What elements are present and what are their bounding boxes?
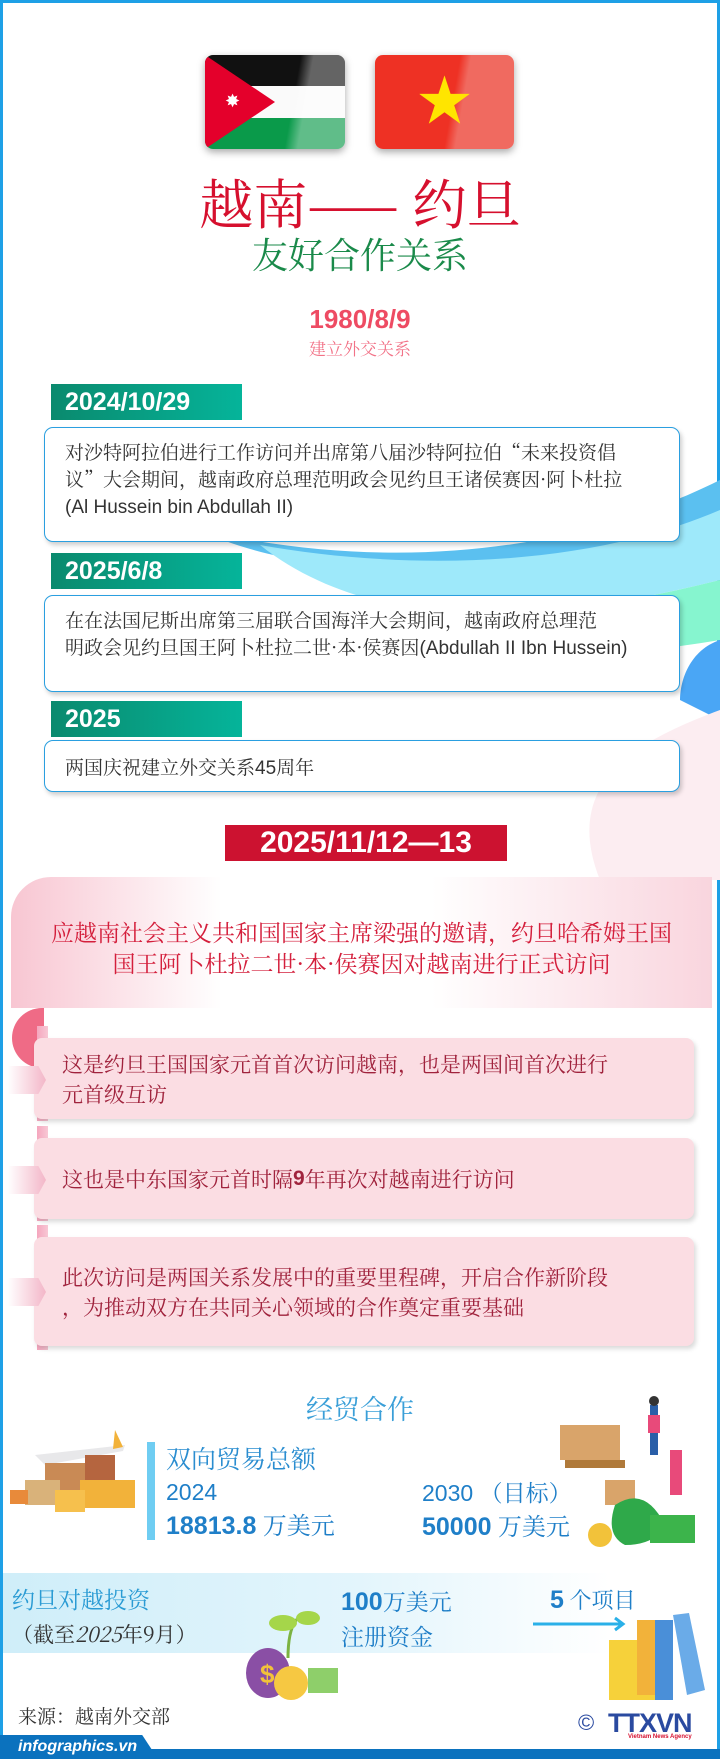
- icon: money bag plant: $: [260, 1659, 275, 1689]
- registered capital: 注册资金: [341, 1619, 433, 1652]
- date 1980: 1980/8/9: [309, 304, 411, 334]
- bullet 3: [12, 1225, 698, 1350]
- logo: TTXVN: ©: [578, 1710, 594, 1735]
- visit date banner: [225, 825, 507, 861]
- tab 2025: 2025: [65, 705, 121, 733]
- tab 2024/10/29: [51, 384, 242, 420]
- invitation panel: 国王阿卜杜拉二世·本·侯赛因对越南进行正式访问: [112, 946, 611, 979]
- footer tab: infographics.vn: [0, 1735, 152, 1754]
- background swirl: [228, 480, 720, 880]
- box 1: [44, 427, 680, 542]
- source: 来源：越南外交部: [18, 1702, 170, 1729]
- bullet 2: 这也是中东国家元首时隔 年再次对越南进行访问: [62, 1164, 515, 1194]
- logo: TTXVN: [578, 1708, 692, 1740]
- arrow: [533, 1616, 626, 1632]
- footer bar: [0, 1749, 720, 1759]
- bullet 2: [12, 1126, 698, 1224]
- icon: cargo plane and trucks: [10, 1430, 135, 1512]
- invitation panel: [11, 877, 712, 1008]
- icon: warehouse workers and money: [560, 1396, 695, 1547]
- invitation panel: 应越南社会主义共和国国家主席梁强的邀请，约旦哈希姆王国: [51, 915, 672, 948]
- investment label: 约旦对越投资: [12, 1582, 150, 1615]
- trade 2024: 18813.8 万美元: [166, 1506, 335, 1541]
- box 1: (Al Hussein bin Abdullah II): [65, 497, 293, 518]
- visit date banner: 2025/11/12—13: [260, 826, 472, 859]
- box 1: 对沙特阿拉伯进行工作访问并出席第八届沙特阿拉伯“未来投资倡: [65, 438, 616, 465]
- projects count: 5 个项目: [550, 1584, 636, 1615]
- investment band: [3, 1573, 717, 1653]
- trade 2030: 50000 万美元: [422, 1507, 570, 1542]
- investment label: （截至2025年9月）: [12, 1619, 197, 1649]
- box 2: 明政会见约旦国王阿卜杜拉二世·本·侯赛因(Abdullah II Ibn Hussein): [65, 633, 628, 660]
- bullet 1: 这是约旦王国国家元首首次访问越南，也是两国间首次进行: [62, 1048, 608, 1078]
- box 3: [44, 740, 680, 792]
- trade 2024: [166, 1479, 335, 1541]
- box 3: 两国庆祝建立外交关系45周年: [65, 753, 314, 780]
- logo: TTXVN: Vietnam News Agency: [628, 1734, 692, 1740]
- decorative pink half circle: [12, 1008, 44, 1068]
- tab 2025: [51, 701, 242, 737]
- investment label: [12, 1582, 197, 1649]
- tab 2025/6/8: 2025/6/8: [65, 557, 162, 585]
- bullet 3: ，为推动双方在共同关心领域的合作奠定重要基础: [62, 1292, 524, 1322]
- trade total label: 双向贸易总额: [166, 1440, 316, 1476]
- icon: binders: [609, 1613, 705, 1700]
- box 1: 议”大会期间，越南政府总理范明政会见约旦王诸侯赛因·阿卜杜拉: [65, 465, 622, 492]
- trade 2030: 2030 （目标）: [422, 1475, 572, 1508]
- flag: Vietnam: ★: [418, 72, 472, 132]
- bullet 2: 9: [293, 1166, 305, 1190]
- footer tab: infographics.vn: infographics.vn: [18, 1738, 137, 1755]
- icon: money bag plant: [246, 1611, 338, 1700]
- title: 越南—— 约旦: [199, 163, 521, 240]
- subtitle: 友好合作关系: [252, 228, 468, 279]
- bullet 1: [12, 1026, 698, 1124]
- trade 2030: [422, 1475, 572, 1542]
- bullet 1: 元首级互访: [62, 1078, 167, 1108]
- box 2: 在在法国尼斯出席第三届联合国海洋大会期间，越南政府总理范: [65, 606, 597, 633]
- flag: Vietnam: [375, 55, 514, 149]
- registered capital: [341, 1584, 452, 1652]
- box 2: [44, 595, 680, 692]
- registered capital: 100万美元: [341, 1584, 452, 1617]
- tab 2025/6/8: [51, 553, 242, 589]
- bullet 3: 此次访问是两国关系发展中的重要里程碑，开启合作新阶段: [62, 1262, 608, 1292]
- trade 2024: 2024: [166, 1479, 217, 1505]
- heading: trade: 经贸合作: [306, 1388, 414, 1427]
- flag: Jordan: [205, 55, 345, 149]
- tab 2024/10/29: 2024/10/29: [65, 388, 190, 416]
- flag: Jordan: ✸: [225, 91, 240, 111]
- logo: TTXVN: TTXVN: [608, 1708, 692, 1738]
- date 1980 caption: 建立外交关系: [309, 335, 411, 360]
- bar: [147, 1442, 155, 1540]
